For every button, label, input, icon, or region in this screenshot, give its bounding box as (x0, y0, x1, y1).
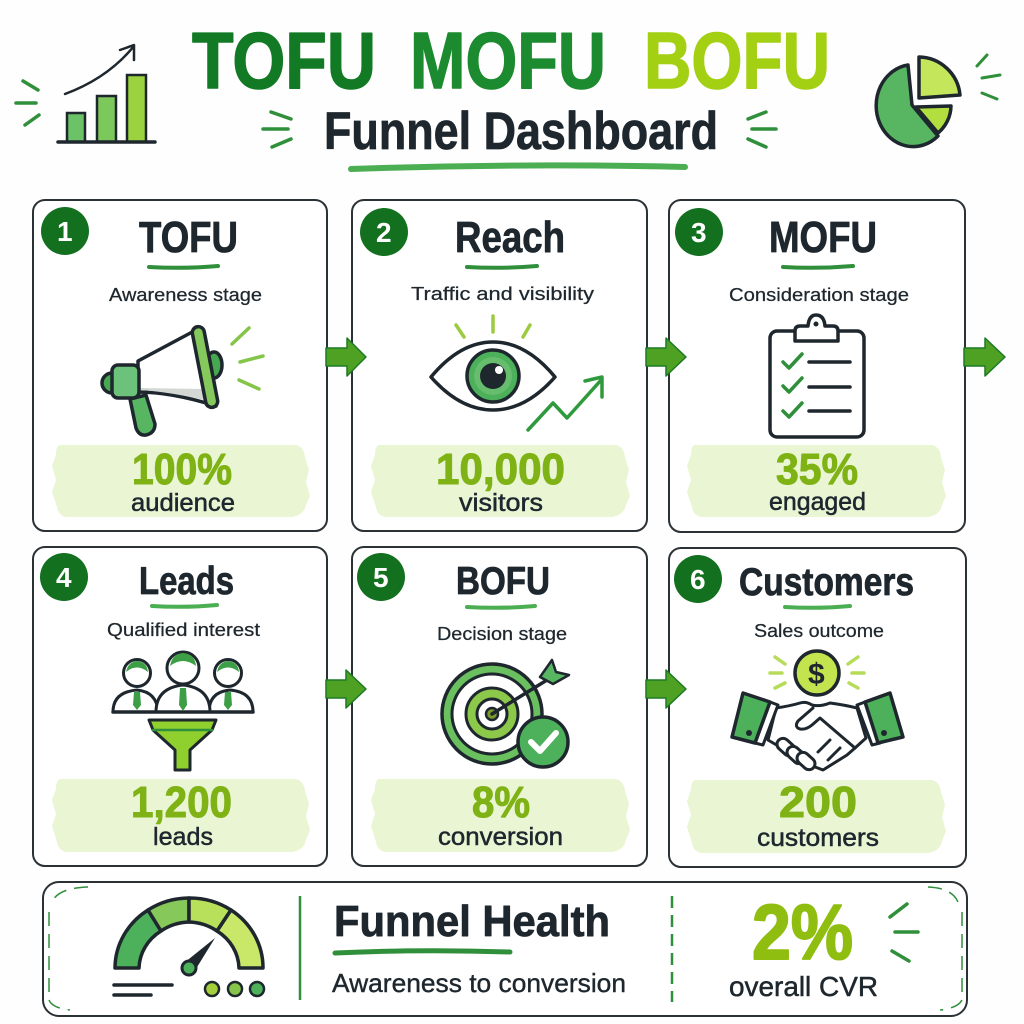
panel: step 1 TOFU (33, 200, 327, 531)
description: awareness stage: Awareness stage (109, 285, 262, 305)
icon: pie chart (876, 55, 1000, 147)
stat: 100% audience (52, 445, 310, 517)
panel: step 6 Customers (669, 548, 966, 867)
stat: 200 customers: customers (757, 824, 879, 852)
icon: handshake with coin: $ (808, 658, 825, 691)
panel: step 4 Leads (33, 547, 327, 866)
panel: step 5 BOFU (352, 547, 647, 866)
title (192, 16, 830, 105)
stat: 1,200 leads (52, 778, 310, 852)
heading: Leads: Leads (139, 560, 234, 603)
stat: 200 customers (687, 778, 946, 853)
icon: eye with trend (431, 316, 602, 430)
stat: 35% engaged (687, 445, 946, 517)
stat: 100% audience: audience (131, 489, 235, 517)
stat: 8% conversion: conversion (438, 823, 563, 851)
arrow: step 1 to 2 (326, 338, 366, 376)
stat: 200 customers: 200 (779, 778, 857, 827)
stat: 8% conversion: 8% (472, 778, 530, 827)
title: MOFU (410, 16, 606, 105)
stat: 2% overall CVR: 2% (752, 888, 853, 976)
step number 1: 1 (57, 216, 73, 247)
stat: 100% audience: 100% (132, 445, 232, 494)
icon: target with check (442, 660, 569, 767)
heading: BOFU: BOFU (456, 560, 550, 603)
panel: funnel health (43, 882, 967, 1016)
description: awareness to conversion: Awareness to conversion (332, 968, 626, 998)
icon: megaphone (102, 326, 263, 435)
heading: Funnel Health: Funnel Health (334, 897, 610, 946)
heading: Customers: Customers (739, 561, 914, 604)
subtitle: Funnel Dashboard (324, 102, 718, 161)
arrow: step 4 to 5 (326, 670, 366, 708)
step number 5 (357, 553, 405, 601)
step number 3: 3 (691, 217, 707, 248)
description: decision stage: Decision stage (437, 624, 567, 644)
description: qualified interest: Qualified interest (107, 620, 260, 640)
step number 4 (40, 553, 88, 601)
step number 1 (41, 207, 89, 255)
subtitle sparkle marks (263, 112, 776, 147)
title underline (351, 165, 685, 169)
stat: 1,200 leads: leads (153, 823, 213, 851)
stat: 10,000 visitors (371, 445, 630, 517)
stat: 35% engaged: 35% (776, 445, 858, 494)
panel: step 3 MOFU (669, 200, 965, 532)
stat: 8% conversion (371, 778, 630, 852)
icon: clipboard checklist (770, 315, 864, 437)
stat: 10,000 visitors: visitors (459, 489, 543, 517)
description: sales outcome: Sales outcome (754, 621, 884, 641)
stat: 35% engaged: engaged (769, 488, 866, 516)
description: consideration: Consideration stage (729, 285, 909, 305)
title: BOFU (644, 16, 830, 105)
step number 4: 4 (56, 562, 72, 593)
arrow: step 2 to 3 (646, 338, 686, 376)
step number 2 (360, 208, 408, 256)
icon: rising bar chart (16, 45, 155, 142)
icon: handshake with coin (732, 651, 903, 772)
step number 2: 2 (376, 217, 392, 248)
heading: Reach: Reach (455, 213, 565, 262)
arrow: step 5 to 6 (646, 670, 686, 708)
stat: 2% overall CVR: overall CVR (729, 971, 878, 1002)
heading: TOFU: TOFU (139, 213, 238, 262)
sparkle marks (890, 904, 918, 961)
description: traffic: Traffic and visibility (411, 284, 594, 304)
step number 6 (674, 555, 722, 603)
stat: 10,000 visitors: 10,000 (436, 445, 565, 494)
icon: gauge (114, 898, 264, 996)
stat: 1,200 leads: 1,200 (131, 778, 232, 827)
stat: 2% overall CVR (729, 888, 878, 1002)
step number 3 (675, 208, 723, 256)
arrow: step 3 onward (964, 338, 1005, 376)
step number 6: 6 (690, 564, 706, 595)
panel: step 2 Reach (352, 200, 647, 531)
icon: people over funnel (113, 652, 253, 770)
heading: MOFU: MOFU (769, 213, 877, 262)
step number 5: 5 (373, 562, 389, 593)
title: TOFU (192, 16, 376, 105)
